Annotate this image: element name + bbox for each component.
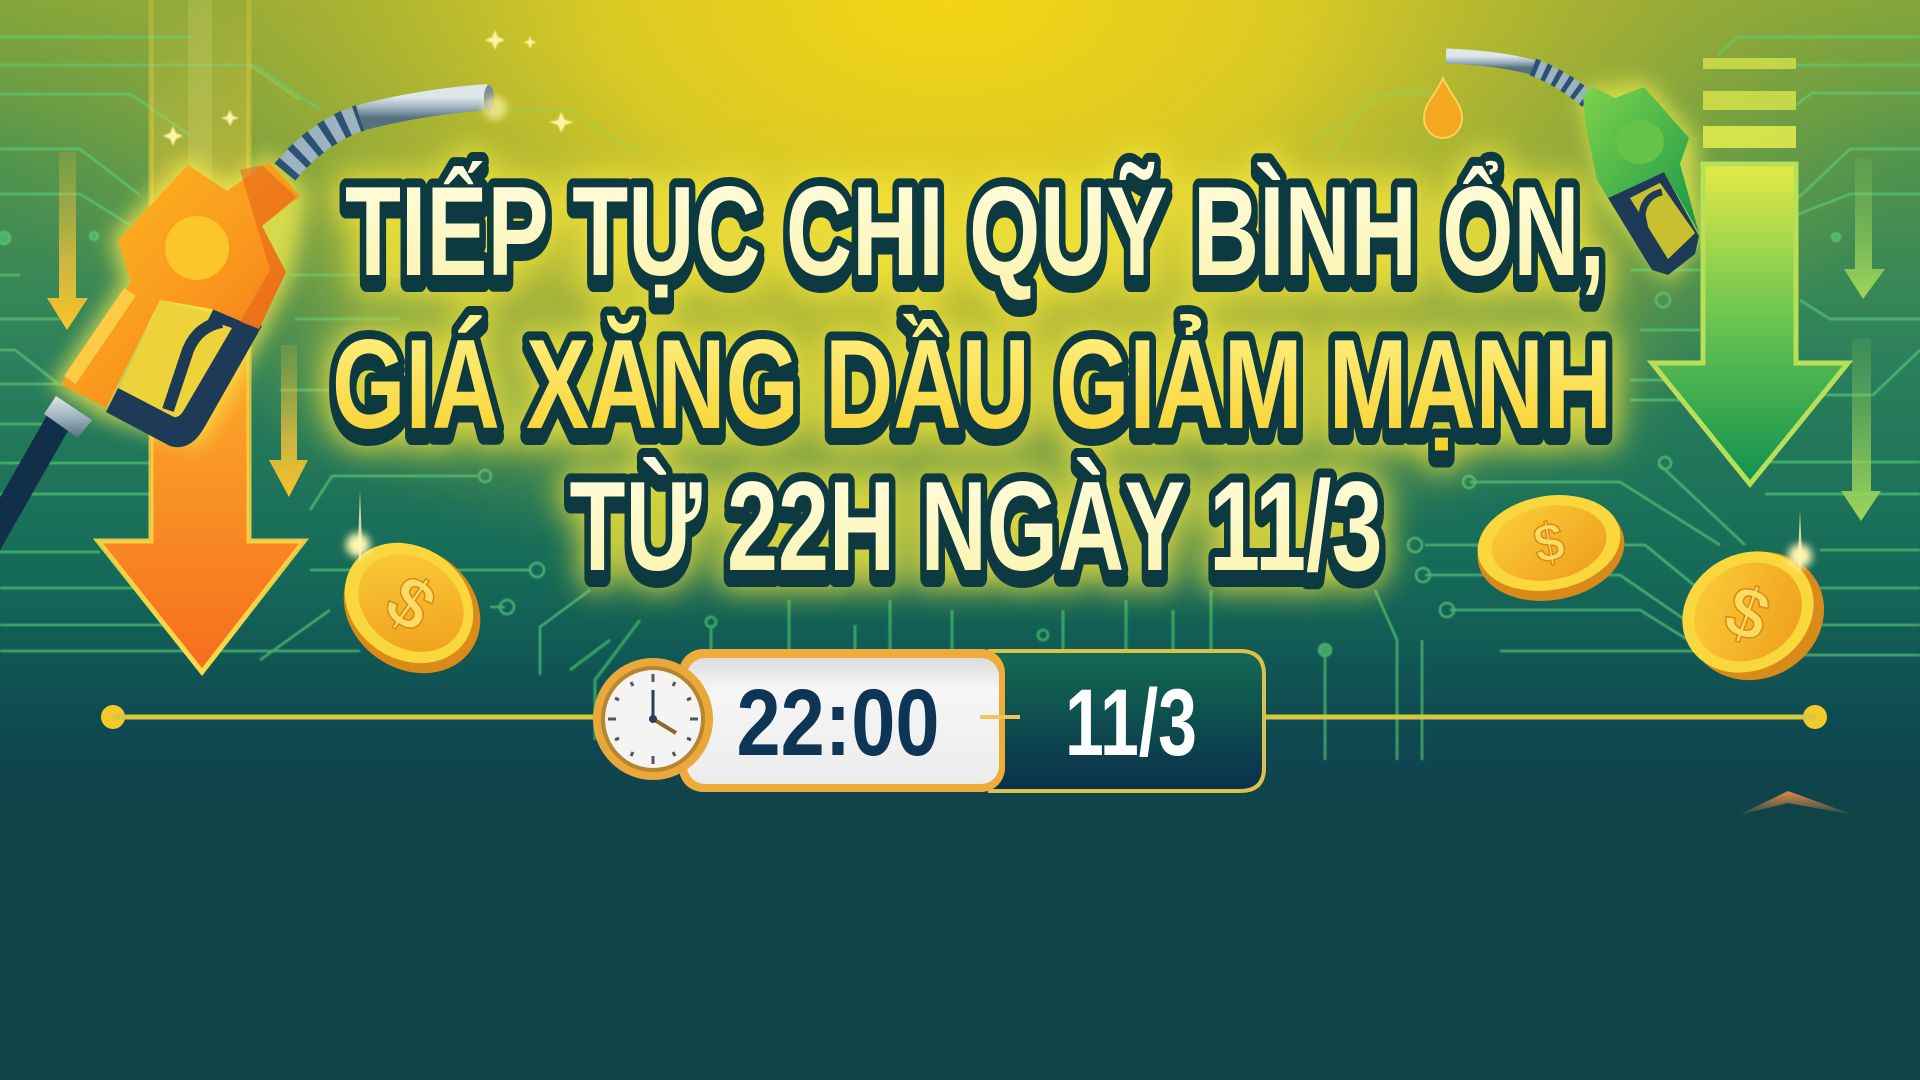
body [1583, 87, 1699, 233]
time text: 22:00 [736, 670, 940, 776]
collar [44, 396, 92, 438]
date text: 11/3 [1065, 670, 1197, 776]
trigger guard window [118, 300, 240, 425]
spark on left coin [346, 490, 370, 565]
circuit lines: top-center [250, 65, 1440, 160]
small green arrow bottom [1841, 339, 1881, 521]
timeline right [1262, 705, 1827, 729]
title line 3: TỪ 22H NGÀY 11/3 [570, 455, 1382, 597]
small green arrow top [1844, 159, 1885, 299]
icon: green fuel nozzle [1446, 56, 1699, 275]
title glow: TỪ 22H NGÀY 11/3 [570, 459, 1382, 601]
icon: coin left: $ [371, 560, 450, 648]
small orange arrow left [47, 152, 88, 330]
badge: time panel [679, 649, 1020, 792]
circuit lines: right [1319, 37, 1920, 760]
icon: coin left [319, 518, 505, 699]
circuit lines: center, above badge [570, 590, 1211, 740]
icon: coin right: $ [1715, 569, 1780, 658]
body [61, 162, 300, 408]
circuit lines: left [0, 37, 590, 675]
small orange arrow right [269, 345, 308, 497]
orange down arrow [98, 0, 304, 672]
green down arrow [1652, 164, 1848, 484]
title line 3 shadow: TỪ 22H NGÀY 11/3 [570, 463, 1382, 605]
trigger guard [1608, 172, 1699, 275]
title [332, 160, 1612, 605]
title glow [330, 164, 1612, 601]
icon: oil drop [1424, 78, 1462, 138]
timeline left [101, 705, 603, 729]
spout [1446, 56, 1535, 68]
trigger guard [106, 306, 262, 447]
connector spark [980, 715, 1020, 719]
icon: coin right [1660, 510, 1848, 705]
sparkles [163, 30, 574, 146]
icon: coin middle: $ [1529, 511, 1569, 575]
spout [360, 97, 488, 118]
badge: date panel [990, 651, 1264, 791]
hose [0, 408, 66, 545]
green arrow bars [1703, 58, 1796, 148]
icon: orange fuel nozzle [0, 85, 507, 545]
icon: clock [593, 658, 713, 780]
icon: coin middle [1469, 484, 1633, 612]
chevron bottom right [1739, 791, 1854, 815]
